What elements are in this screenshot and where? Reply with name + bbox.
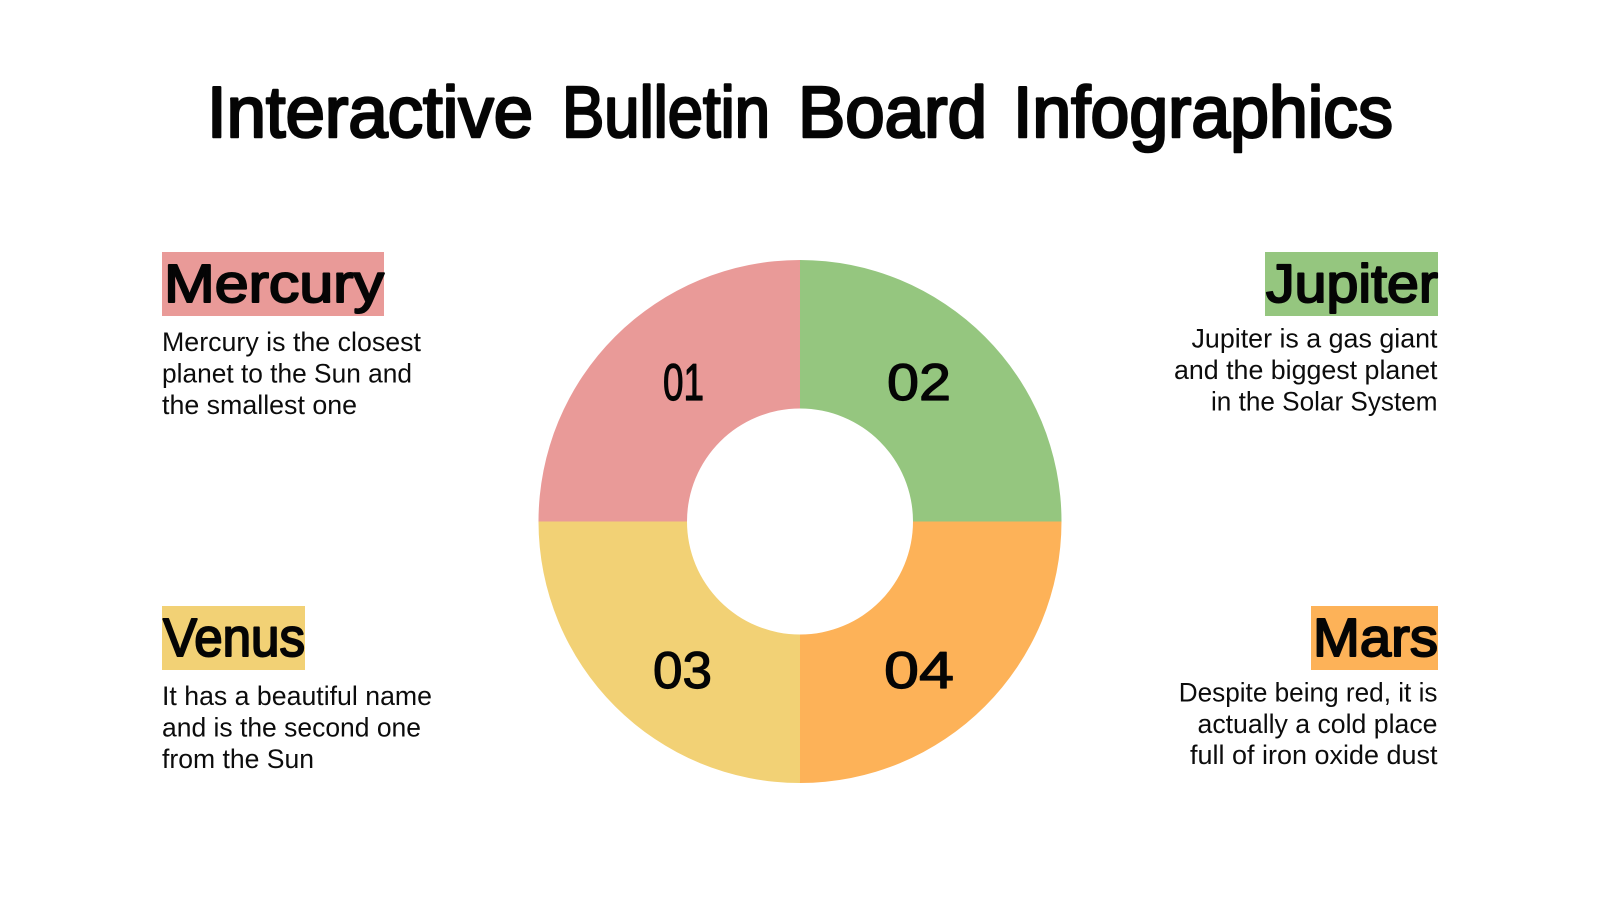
donut chart [538,260,1062,783]
text: Venus description: from the Sun [162,744,314,774]
title: Board [798,73,987,153]
text: Jupiter description: in the Solar System [1211,387,1438,417]
text: Jupiter description [1174,324,1438,417]
text: Mars description: full of iron oxide dust [1190,740,1438,770]
segment 03 [538,522,800,783]
segment 04: 04 [884,642,954,700]
title: Interactive [207,73,533,153]
panel: Jupiter [1174,252,1438,417]
text: Mars description [1179,678,1438,770]
heading: Venus: Venus [163,608,305,668]
panel: Venus [162,606,432,774]
text: Jupiter description: Jupiter is a gas giant [1192,324,1438,354]
text: Mercury description: planet to the Sun and [162,358,412,388]
text: Mars description: Despite being red, it is [1179,678,1438,708]
heading: Mercury: Mercury [164,254,384,314]
segment 04 [800,522,1062,783]
heading: Mars: Mars [1313,608,1438,668]
text: Jupiter description: and the biggest planet [1174,355,1438,385]
text: Venus description: It has a beautiful name [162,681,432,711]
panel: Mercury [162,252,422,420]
text: Venus description: and is the second one [162,712,421,742]
panel: Mars [1179,606,1438,770]
heading: Jupiter: Jupiter [1266,254,1438,314]
segment 02: 02 [887,354,951,412]
text: Mercury description: Mercury is the closest [162,327,422,357]
text: Mars description: actually a cold place [1198,709,1438,739]
segment 03: 03 [653,642,712,700]
segment 01: 01 [663,354,704,412]
title: Bulletin [562,73,770,153]
text: Mercury description: the smallest one [162,390,357,420]
segment 01 [538,260,800,522]
text: Mercury description [162,327,422,420]
segment 02 [800,260,1062,522]
text: Venus description [162,681,432,774]
title: Infographics [1013,73,1393,153]
